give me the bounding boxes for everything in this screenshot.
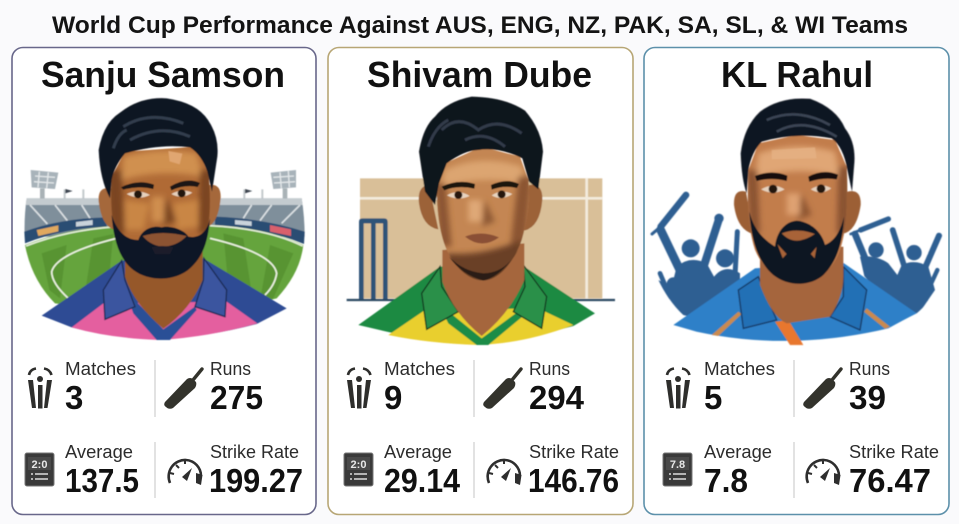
stat: runs: 275 [210,379,263,416]
stat: matches: 9 [384,379,402,416]
stat: matches [666,358,775,416]
hair [99,98,218,198]
stadium background [24,170,305,310]
bats [652,225,663,234]
ears [734,191,861,234]
stat: average [663,441,772,499]
stat: average: Average [65,441,133,462]
stat: strike rate: Strike Rate [529,441,619,462]
face [748,135,847,283]
icon: speedometer [488,460,522,485]
icon: speedometer [807,460,840,485]
stat: runs: 294 [529,379,585,416]
icon: scoreboard: 2:0 [351,459,366,471]
stat: runs [483,358,585,416]
panel: Sanju Samson [12,48,316,514]
stat: average [25,441,139,499]
beard [112,215,210,279]
player name: Shivam Dube: Shivam Dube [367,54,592,95]
stat: average: 29.14 [384,462,461,499]
panel: KL Rahul [644,48,949,514]
stat: strike rate: 76.47 [849,462,931,499]
beard [749,212,844,284]
stat: average: 7.8 [704,462,748,499]
stat: runs: Runs [210,358,251,379]
lips [777,230,817,258]
stat: runs [803,358,890,416]
icon: speedometer [169,460,202,485]
neck [125,250,203,329]
hair [419,97,543,205]
stat: average: Average [704,441,772,462]
brows and eyes [755,172,838,193]
stat: matches: 3 [65,379,83,416]
stat: runs: Runs [529,358,570,379]
stat: average [344,441,461,499]
player name: KL Rahul: KL Rahul [721,54,873,95]
stat: matches: Matches [704,358,775,379]
stat: strike rate: 146.76 [528,462,619,499]
icon: cricket bat [803,369,841,409]
face [111,147,210,278]
icon: stumps [28,368,52,408]
stat: runs: 39 [849,379,886,416]
portrait: Shivam Dube with pitch [347,97,615,345]
icon: stumps [666,368,690,408]
jersey [358,265,595,345]
icon: scoreboard: 2:0 [32,459,47,471]
stat: runs [164,358,263,416]
icon: scoreboard: 7.8 [670,459,685,471]
hair [741,98,854,193]
crowd silhouettes [652,195,939,323]
lips [143,233,187,254]
neck [760,247,843,323]
jersey [42,258,287,340]
stat: strike rate [488,441,619,499]
face shading [107,151,213,237]
stat: average: 137.5 [65,462,139,499]
icon: stumps [347,368,371,408]
mouth and jaw shadow [449,233,518,281]
stat: strike rate: Strike Rate [210,441,299,462]
panel: Shivam Dube [328,48,633,514]
tan backdrop and stumps [347,178,615,300]
stat: average: Average [384,441,452,462]
stat: strike rate [807,441,939,499]
stat: strike rate [169,441,303,499]
ears [99,185,221,230]
player name: Sanju Samson: Sanju Samson [41,54,285,95]
icon: cricket bat [483,369,521,409]
face shading [435,161,532,283]
brows and eyes [442,181,519,199]
stat: strike rate: Strike Rate [849,441,939,462]
stat: runs: Runs [849,358,890,379]
icon: cricket bat [164,369,202,409]
title: World Cup Performance Against AUS, ENG, NZ, PAK, SA, SL, & WI Teams [52,12,908,39]
stat: matches: Matches [65,358,136,379]
stat: matches: Matches [384,358,455,379]
face shading [747,146,850,233]
face [437,147,529,281]
ears [419,185,542,231]
portrait: Sanju Samson with stadium [24,98,305,340]
stat: matches: 5 [704,379,722,416]
stat: strike rate: 199.27 [209,462,303,499]
brows and eyes [121,181,200,198]
stat: matches [28,358,136,416]
stat: matches [347,358,455,416]
neck [442,243,524,336]
jersey [673,262,917,345]
portrait: KL Rahul with crowd [652,98,939,345]
